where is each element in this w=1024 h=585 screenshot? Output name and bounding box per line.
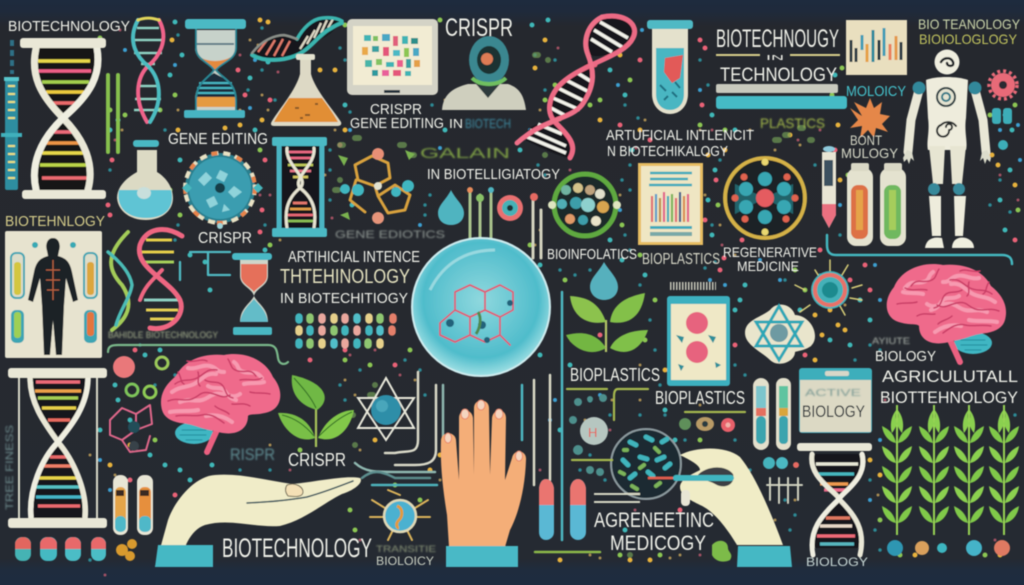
label: Bioinformatics: BIOINFOLATICS: [547, 246, 637, 263]
label: plastics green: PLASTICS: [760, 115, 825, 131]
green connector to brain: [108, 345, 288, 364]
scientist figure: [442, 36, 526, 110]
gold ring of cells: [725, 158, 805, 238]
label: in biotelligiatogy: IN BIOTELLIGIATOGY: [427, 166, 560, 183]
label: Bioplastics right: BIOPLASTICS: [655, 388, 745, 408]
ring cells near brain: [113, 356, 168, 398]
data document: [638, 163, 703, 245]
label: molecular biology: BONT: [850, 132, 882, 148]
label: agricultural medicine: MEDICOGY: [610, 532, 706, 555]
olive connectors: [567, 389, 745, 460]
label: CRISPR under circle: CRISPR: [198, 230, 252, 247]
label: Moloicy: MOLOICY: [846, 83, 906, 100]
circuit branch connector: [180, 252, 230, 280]
cell marker near magnifier: H: [588, 425, 597, 440]
label: Artificial intelligence in biotechnology: [606, 127, 754, 160]
label: Gene editing: GENE EDITING: [168, 131, 268, 148]
green ring of cells: [548, 174, 621, 236]
flower row bottom right: [887, 540, 1010, 556]
star of molecule: [358, 378, 414, 440]
plant sprout left: [278, 375, 354, 447]
vial pair: [847, 163, 906, 246]
label: gene ediotics faded: GENE EDIOTICS: [335, 229, 445, 241]
pale lines beside magnifier: [594, 494, 640, 502]
yellow flower: [116, 539, 137, 561]
cloud with star: [745, 305, 815, 364]
label: agricultural medicine: AGRENEETINC: [594, 509, 714, 532]
cell sun icon: [370, 490, 430, 540]
label: molecular biology: MULOGY: [841, 145, 899, 161]
colored DNA helix: [133, 18, 163, 122]
round flask: [117, 140, 173, 220]
label: biology bottom: BIOLOGY: [806, 555, 868, 569]
molecule hexagon bottom-left: [110, 405, 152, 452]
label: Artificial intelligence technology: [280, 249, 420, 307]
blob cluster left of magnifier: [569, 394, 607, 476]
label: biology small right: BIOLOGY: [875, 348, 936, 365]
four green crop plants: [882, 405, 1019, 535]
left open hand: [155, 475, 361, 567]
cell marker near magnifier: [580, 417, 608, 445]
label: Bioplastics left: BIOPLASTICS: [570, 365, 660, 385]
DNA frame top left: [20, 38, 106, 199]
ribbon DNA: [252, 17, 342, 60]
drop and pin row: [438, 187, 541, 258]
center raised hand: [441, 400, 526, 567]
magnifier lens: [611, 429, 681, 499]
biology card: [799, 368, 872, 433]
label: Biotechnology large: BIOTECHNOLOGY: [222, 533, 372, 563]
label: Regenerative medicine: REGENERATIVE: [723, 244, 817, 260]
label: CRISPR mid: CRISPR: [288, 450, 346, 470]
DNA bottom center right: [797, 443, 872, 555]
capsule row: [15, 537, 106, 561]
conical flask orange: [271, 54, 341, 126]
biology card: ACTIVE: [805, 388, 862, 399]
sunburst cell: [795, 260, 862, 315]
connector line under vials: [827, 235, 1012, 264]
right brain: [887, 264, 1006, 362]
title block: Biotechnology in Technology: TECHNOLOGY: [720, 65, 837, 86]
label: CRISPR gene editing: [350, 101, 511, 132]
label: Biotehnology olive: BIOTEHNLOGY: [5, 213, 105, 230]
water drop above sprout: [590, 262, 618, 300]
biology card: BIOLOGY: [802, 402, 865, 421]
green connector bottom: [535, 551, 600, 553]
syringe column left edge: [1, 40, 22, 190]
label: Regenerative medicine: MEDICINE: [737, 258, 799, 274]
title: CRISPR large: CRISPR: [445, 14, 513, 42]
brain left: [161, 354, 280, 452]
small hourglass: [232, 253, 272, 335]
small vial pair center right: [753, 378, 791, 450]
chart panel: [846, 20, 907, 75]
title block: Biotechnology in Technology: [716, 25, 847, 109]
DNA helix small: [108, 252, 132, 325]
label: biology small: BIOLOICY: [376, 554, 434, 568]
body diagram panel: [5, 231, 102, 358]
title block: Biotechnology in Technology: IN: [766, 55, 784, 62]
label: CRISPR gene editing: BIOTECH: [465, 116, 511, 131]
robot: [903, 50, 991, 248]
label: Bio technology biology top right: [918, 16, 1021, 47]
label: molecular biology: [841, 132, 899, 161]
label: Agricultural biotechnology: BIOTTEHNOLOGY: [880, 388, 1018, 407]
label: blurred caption under DNA: BAHIDLE BIOTECHNOLOGY: [108, 330, 218, 340]
DNA frame bottom left: [8, 368, 107, 528]
title block: Biotechnology in Technology: BIOTECHNOUGY: [716, 25, 839, 53]
eye cell icons: [679, 417, 735, 432]
molecular network: [338, 148, 415, 224]
label: CRISPR gene editing: CRISPR: [370, 101, 422, 118]
label: Regenerative medicine: [723, 244, 817, 274]
right hand with pen: [648, 448, 792, 567]
label: Artificial intelligence technology: THTEHINOLOGY: [280, 266, 410, 288]
label: CRISPR gene editing: IN: [449, 116, 463, 131]
green blob beside cuff: [712, 541, 731, 562]
orange flower burst: [850, 98, 890, 138]
central petri sphere: [412, 238, 550, 376]
green teal DNA: [111, 232, 129, 330]
test tubes pair: [113, 475, 153, 535]
tall test tubes: [539, 479, 586, 540]
label: biology small right: [872, 336, 936, 365]
green sprout center: [566, 293, 648, 352]
circuit lines by center hand: [355, 372, 443, 485]
monitor with gene grid: [347, 19, 438, 95]
vertical faded text left: TREE FINESS: [4, 425, 16, 510]
pin tools small: [763, 457, 802, 503]
label: agricultural medicine: [594, 509, 714, 555]
label: Agricultural biotechnology: AGRICULUTALL: [882, 367, 1018, 386]
barcode strip: [670, 282, 716, 290]
label: Artificial intelligence in biotechnology: ARTUFICIAL INTLENCIT: [606, 127, 754, 144]
pink DNA with black and white stripes: [517, 16, 635, 158]
label: Artificial intelligence technology: ARTIHICIAL INTENCE: [288, 249, 420, 266]
test tube with sample: [647, 20, 693, 114]
vertical channel lines: [522, 292, 562, 540]
blurred green banner text: GALAIN: [420, 145, 510, 162]
label: biology small right: AYIUTE: [872, 336, 910, 346]
hourglass top: [184, 19, 246, 118]
label: Artificial intelligence technology: IN BIOTECHITIOGY: [280, 290, 408, 307]
pink DNA mid-left: [139, 230, 182, 329]
syringe: [822, 146, 836, 228]
bio card: [667, 296, 730, 386]
label: blurred Rispr: RISPR: [230, 445, 275, 464]
label: biology small: [376, 544, 436, 568]
label: Biotechnology top left: BIOTECHNOLOGY: [8, 18, 130, 35]
label: biology small: TRANSITIE: [376, 544, 436, 554]
hourglass DNA: [272, 137, 327, 237]
pill grid: [299, 317, 393, 345]
green tube pair: [108, 75, 118, 152]
teal cluster right of robot: [992, 108, 1012, 150]
pink gear icon: [989, 71, 1017, 99]
gene cluster circle: [182, 153, 263, 229]
label: Bio technology biology top right: BIOIOLOGLOGY: [919, 31, 1018, 47]
label: CRISPR gene editing: GENE EDITING: [350, 115, 444, 132]
label: Bioplastics: BIOPLASTICS: [642, 251, 720, 268]
label: Agricultural biotechnology: [880, 367, 1018, 407]
label: Artificial intelligence in biotechnology: N BIOTECHIKALOGY: [607, 143, 728, 160]
